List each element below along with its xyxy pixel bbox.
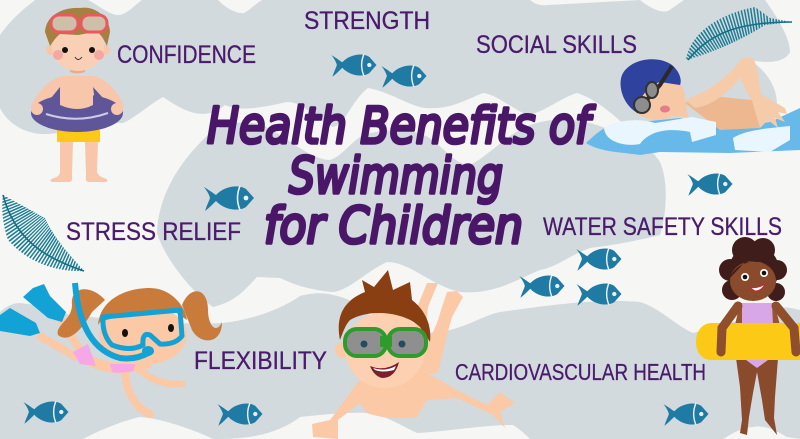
fish	[576, 248, 622, 271]
fish	[204, 186, 254, 211]
fish	[688, 173, 732, 196]
fish	[520, 275, 564, 298]
fish	[218, 403, 262, 426]
leaf: left	[3, 195, 84, 271]
illustration: boy with swim ring	[31, 8, 124, 182]
label: social skills: SOCIAL SKILLS	[476, 31, 637, 59]
leaf: top right	[688, 22, 792, 60]
label: confidence: CONFIDENCE	[117, 41, 256, 69]
label: flexibility: FLEXIBILITY	[194, 347, 327, 375]
title	[207, 97, 595, 255]
fish	[332, 54, 376, 77]
fish	[24, 401, 68, 424]
illustration: swimmer in cap	[586, 57, 800, 155]
illustration: girl with snorkel	[0, 283, 222, 414]
fish	[382, 65, 426, 88]
label: strength: STRENGTH	[304, 7, 430, 35]
fish	[664, 403, 708, 426]
fish	[576, 283, 622, 306]
title: Swimming	[289, 147, 503, 205]
label: cardiovascular health: CARDIOVASCULAR HEALTH	[455, 359, 706, 385]
title: Health Benefits of	[207, 97, 595, 155]
illustration: girl with yellow float	[696, 237, 800, 435]
label: stress relief: STRESS RELIEF	[66, 218, 241, 246]
illustration: boy in green goggles	[312, 270, 515, 439]
title: for Children	[264, 197, 523, 255]
